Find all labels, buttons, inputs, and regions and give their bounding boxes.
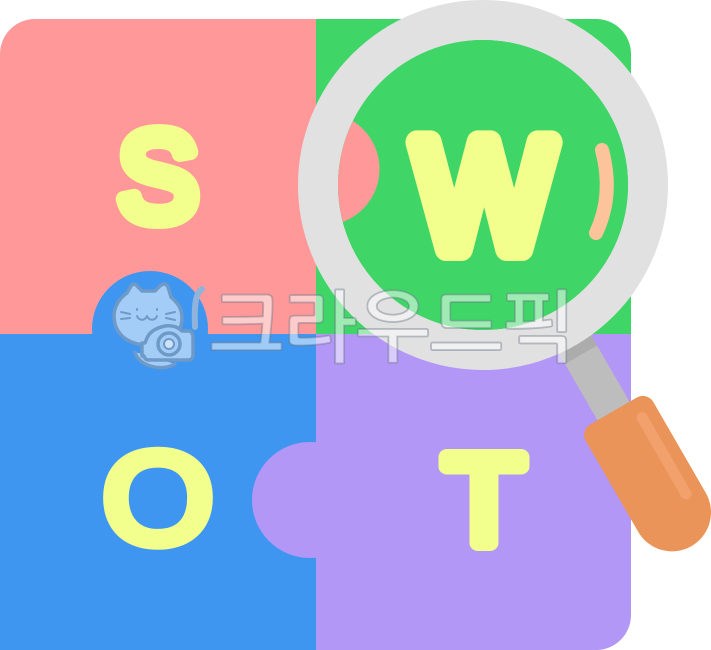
puzzle piece: W weaknesses (green)	[316, 19, 631, 397]
letter S: S	[118, 107, 198, 247]
grip highlight	[642, 418, 686, 494]
watermark text: 크라우드픽	[210, 284, 576, 372]
puzzle piece: O opportunities (blue)	[0, 271, 316, 650]
cat body	[114, 284, 182, 345]
magnifier lens	[338, 40, 628, 330]
puzzle piece: S strengths (pink)	[0, 19, 316, 334]
magnified pink puzzle knob	[338, 121, 380, 222]
camera strap	[195, 289, 202, 327]
letter O: O	[102, 425, 214, 571]
magnifier handle grip	[580, 392, 711, 566]
cat face	[121, 309, 175, 320]
camera lens	[158, 333, 180, 355]
magnifier ring	[318, 20, 648, 350]
lens glare	[596, 150, 607, 233]
puzzle piece: T threats (purple)	[252, 334, 631, 650]
letter T: T	[444, 431, 524, 570]
magnifier handle neck	[552, 323, 630, 421]
watermark: cat with camera logo	[114, 284, 202, 368]
camera body	[142, 326, 193, 360]
letter W magnified: W	[416, 109, 552, 282]
camera tail arc	[135, 352, 175, 368]
